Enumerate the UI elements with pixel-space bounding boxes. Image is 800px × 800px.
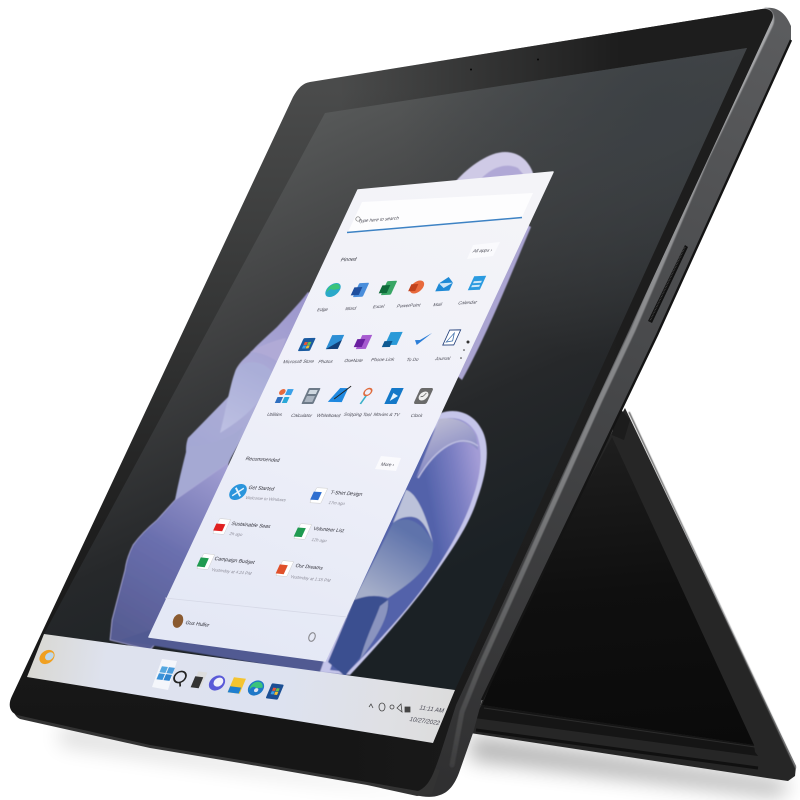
pinned labels row 2: To Do [405,357,420,363]
pagination dots [460,340,470,359]
kickstand inner panel [482,437,754,745]
search box [347,193,533,232]
icon: edge [245,680,267,696]
clock date: 10/27/2022 [408,716,441,727]
icon: whiteboard [328,386,351,402]
pinned labels row 2: Photos [317,359,334,365]
search icon [356,217,360,221]
pinned labels row 3: Clock [409,413,424,419]
icon: onenote [353,335,372,349]
lower fold [328,596,389,676]
wallpaper bloom [110,152,534,678]
recommended item: t-shirt design [309,488,363,506]
icon: start button [152,659,177,690]
recommended item: campaign budget [196,553,256,576]
all apps button: All apps › [472,248,494,254]
pinned labels row 1: PowerPoint [395,303,422,309]
petal: lower band under menu [120,630,360,678]
icon: to do [413,333,432,345]
screen [44,48,747,690]
recommended item: get started: Welcome to Windows [245,495,288,502]
icon: chat [206,675,228,691]
recommended item: sustainable seas [212,519,272,537]
icon: word [350,283,369,297]
more button: More › [379,462,396,468]
pinned icons row 3 [274,386,434,404]
pinned labels row 2 [282,356,451,365]
pinned labels row 3: Snipping Tool [342,412,372,418]
pinned labels row 1: Mail [432,302,443,308]
icon: widgets [37,649,57,665]
pinned labels row 2: Journal [434,356,451,362]
icon: utilities [274,389,294,403]
inner fold [354,520,433,600]
recommended item: our dreams: Yesterday at 1:15 PM [290,574,332,583]
more button [375,456,401,471]
search underline [347,218,522,232]
pinned labels row 1: Word [344,306,357,312]
pinned labels row 2: OneNote [343,358,364,364]
recommended item: sustainable seas: 2h ago [229,531,244,537]
recommended item: t-shirt design: T-Shirt Design [329,490,363,498]
recommended item: volunteer list [293,524,345,543]
petal: lower left [110,463,230,650]
all apps button [467,242,500,259]
system tray icons [369,703,410,712]
icon: mail [435,277,456,291]
search text: Type here to search [357,216,400,225]
pinned labels row 1: Excel [372,304,385,310]
footer divider [165,598,347,617]
icon: calculator [301,388,321,404]
icon: powerpoint [407,280,426,294]
recommended item: campaign budget: Campaign Budget [213,556,256,566]
recommended item: campaign budget: Yesterday at 4:24 PM [211,567,253,576]
icon: search [171,671,188,687]
petal: right sliver [450,224,531,380]
pinned labels row 1 [316,300,478,313]
recommended item: our dreams: Our Dreams [294,563,324,572]
recommended item: sustainable seas: Sustainable Seas [230,521,272,530]
pinned labels row 3 [266,412,424,419]
icon: calendar [468,276,486,290]
pinned labels row 3: Calculator [290,413,313,419]
icon: photos [326,335,344,349]
pinned labels row 3: Utilities [266,412,284,418]
recommended heading: Recommended [244,456,281,464]
icon: task view [191,671,207,689]
start menu panel [149,172,553,661]
petal: upper left [175,292,320,500]
tablet body side frame [400,8,791,797]
frame highlight stripe [452,10,772,765]
recommended item: volunteer list: Volunteer List [312,526,345,534]
lower edge band [12,700,440,796]
icon: store [298,338,316,351]
outer black edge line [482,40,791,700]
icon: store [266,683,284,700]
pinned labels row 1: Calendar [457,300,478,306]
pinned heading: Pinned [339,257,358,263]
cast shadow under tablet [60,725,790,800]
kickstand outer rim highlight [629,412,796,768]
user avatar [171,613,185,629]
recommended item: t-shirt design: 17m ago [328,500,347,506]
clock time: 11:11 AM [418,705,445,715]
icon: journal [443,330,461,345]
recommended item: get started [226,484,288,502]
user name: Gus Huller [184,620,211,629]
curled tube [220,362,272,433]
pinned icons row 1 [323,276,486,297]
icon: movies and tv [384,388,404,404]
camera and sensors [470,58,539,71]
pinned labels row 2: Microsoft Store [282,359,315,365]
kickstand [470,405,796,781]
pinned icons row 2 [298,330,470,359]
icon: phone link [382,332,403,347]
power icon [308,632,316,642]
pinned labels row 2: Phone Link [370,357,396,363]
icon: clock [413,388,434,404]
icon: edge [323,283,343,297]
petal: right main [320,411,487,676]
pinned labels row 3: Whiteboard [315,413,342,419]
icon: file explorer [228,677,246,694]
recommended item: get started: Get Started [247,485,275,492]
pinned labels row 3: Movies & TV [372,412,401,418]
icon: excel [378,281,397,295]
petal: top [455,152,534,190]
pinned labels row 1: Edge [316,307,329,313]
hinge [612,405,630,440]
speaker slit [648,245,688,323]
taskbar [27,634,455,743]
recommended item: our dreams [275,560,332,583]
recommended item: volunteer list: 12h ago [311,537,328,543]
icon: snipping tool [359,388,373,404]
